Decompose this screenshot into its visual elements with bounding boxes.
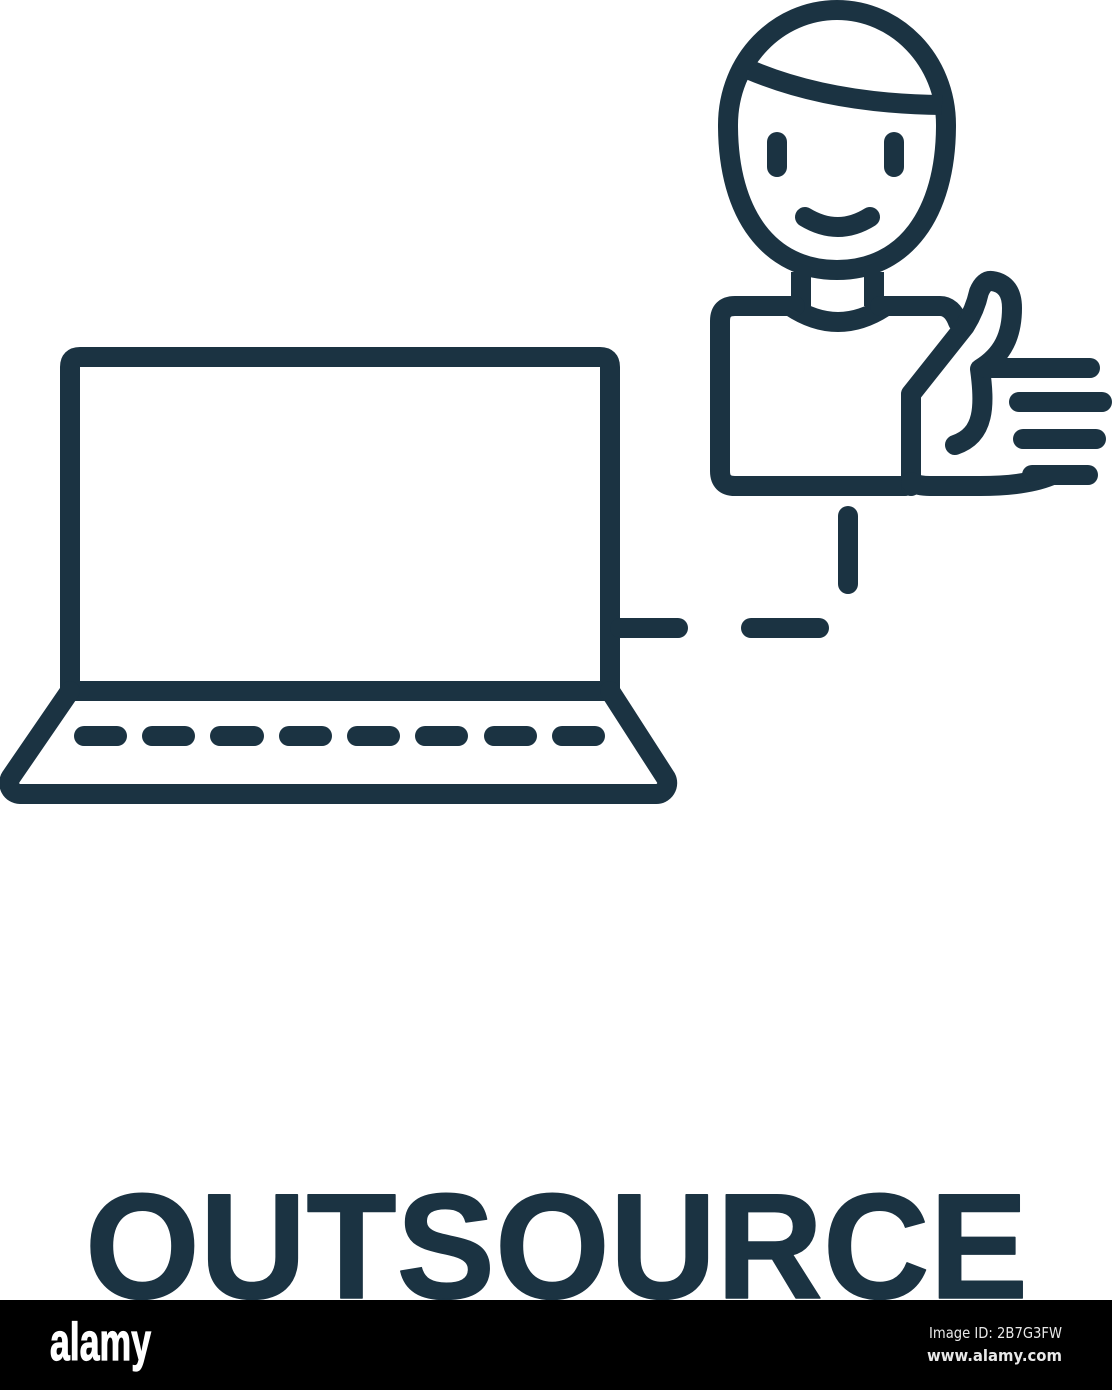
smile	[805, 217, 870, 227]
footer bar	[0, 1300, 1112, 1390]
fingers	[985, 368, 1102, 475]
icon: laptop	[9, 357, 667, 794]
hair line	[750, 70, 942, 105]
laptop keyboard keys	[84, 726, 595, 746]
alamy logo: alamy	[50, 1313, 151, 1372]
website: www.alamy.com	[927, 1346, 1062, 1365]
torso	[720, 306, 958, 486]
palm edge	[911, 476, 1050, 486]
image id: Image ID: 2B7G3FW	[929, 1324, 1062, 1342]
neck and collar	[790, 272, 886, 322]
icon: person with open hand	[720, 10, 1102, 486]
eyes	[777, 142, 894, 167]
laptop screen	[70, 357, 610, 691]
laptop base	[9, 691, 667, 794]
head	[728, 10, 946, 270]
title: OUTSOURCE	[85, 1162, 1028, 1330]
dashed connector between laptop and person	[620, 516, 848, 628]
arm and thumb	[911, 281, 1012, 486]
